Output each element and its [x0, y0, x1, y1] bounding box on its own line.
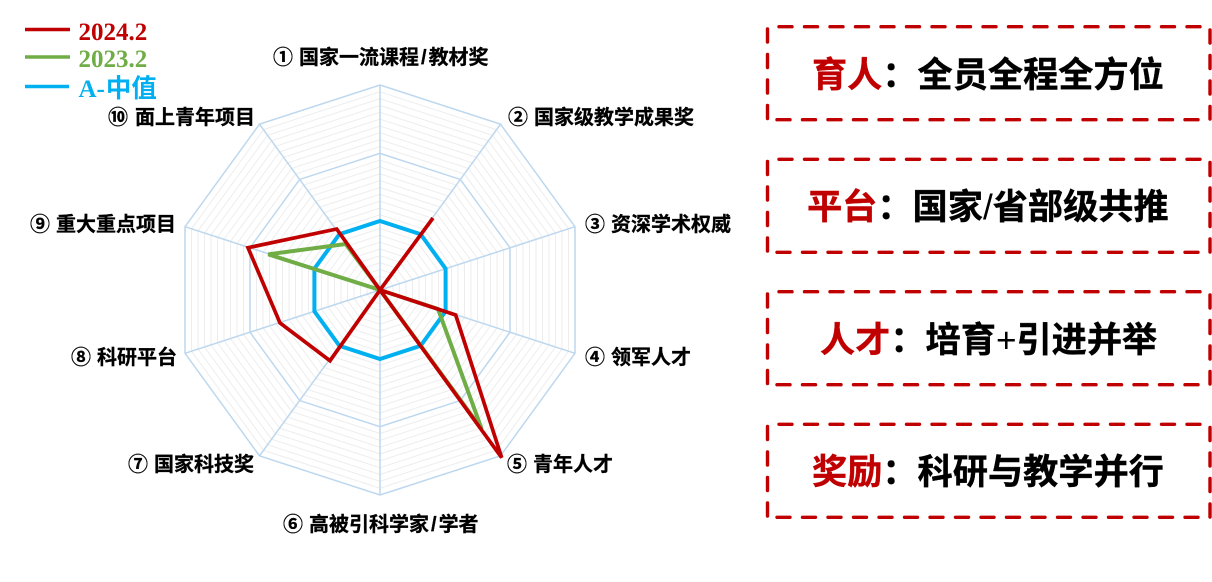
series: A-median — [314, 221, 446, 359]
label 3: 资深学术权威 — [611, 213, 731, 236]
label 1: ① — [273, 46, 293, 69]
legend: 2024.2: 2024.2 — [78, 19, 147, 46]
label 7: 国家科技奖 — [154, 452, 254, 476]
label 1: /教材奖 — [421, 47, 489, 69]
radar chart — [185, 85, 575, 495]
label 5: 青年人才 — [533, 453, 613, 476]
label 8: 科研平台 — [97, 345, 177, 369]
legend — [25, 19, 157, 105]
label 4: 领军人才 — [611, 346, 691, 369]
label 6: /学者 — [431, 514, 479, 536]
legend: A-median: A-中值 — [78, 68, 157, 105]
text: 平台: 平台：国家/省部级共推 — [807, 188, 1169, 227]
label 9: 重大重点项目 — [56, 213, 176, 236]
label 10: 面上青年项目 — [135, 106, 255, 129]
label 10: ⑩ — [108, 106, 128, 129]
text: 育人: 育人：全员全程全方位 — [812, 56, 1164, 95]
label 8: ⑧ — [71, 346, 91, 369]
label 7: ⑦ — [128, 453, 148, 476]
label 6: 高被引科学家 — [309, 512, 429, 536]
label 2: ② — [508, 106, 528, 129]
axis labels — [30, 45, 731, 536]
label 9: ⑨ — [30, 213, 50, 236]
label 3: ③ — [585, 213, 605, 236]
radar grid — [185, 85, 575, 495]
text: 奖励: 奖励：科研与教学并行 — [812, 453, 1164, 492]
label 1: 国家一流课程 — [299, 45, 419, 69]
label 5: ⑤ — [507, 453, 527, 476]
text: 人才: 人才：培育+引进并举 — [820, 321, 1157, 360]
label 6: ⑥ — [283, 513, 303, 536]
label 2: 国家级教学成果奖 — [534, 105, 694, 129]
series: 2023.2 — [268, 244, 482, 429]
series: 2024.2 — [248, 218, 502, 458]
label 4: ④ — [585, 346, 605, 369]
legend: 2023.2: 2023.2 — [78, 46, 147, 73]
